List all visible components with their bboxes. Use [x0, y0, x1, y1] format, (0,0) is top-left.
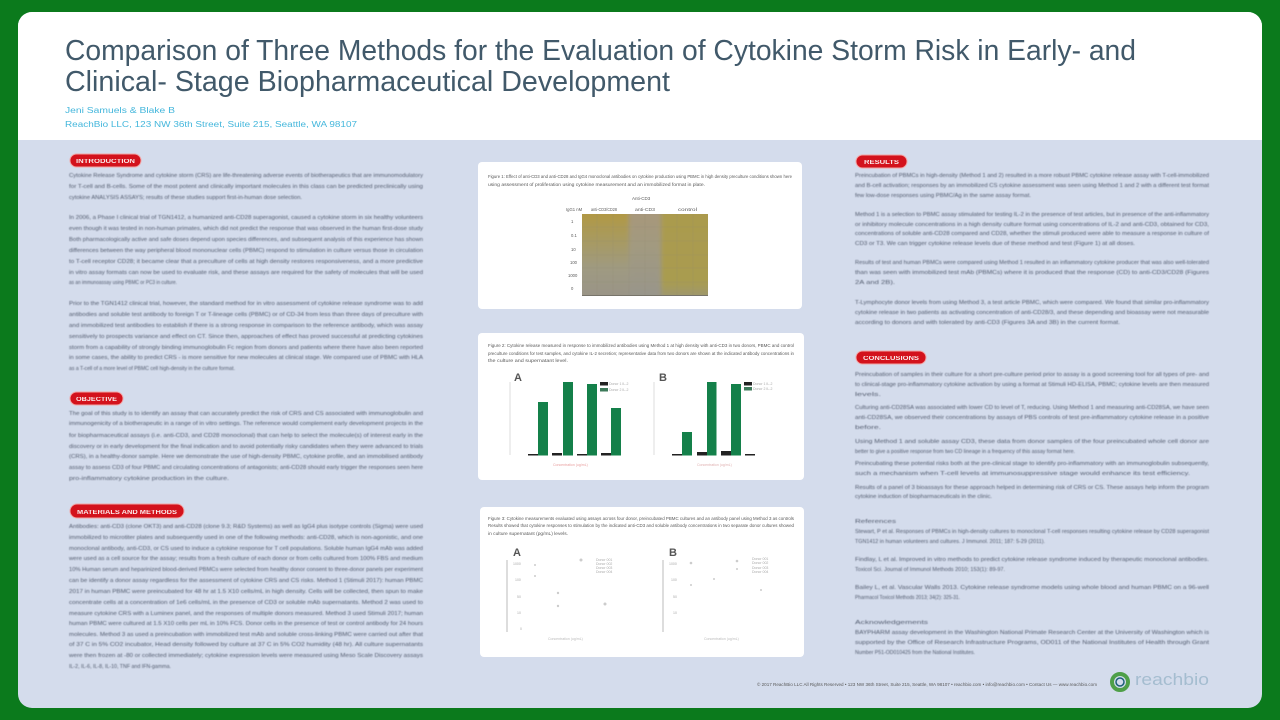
panel: figure 3 line charts: [480, 507, 804, 657]
text block: references: supported by the Office of Research Infrastructure Programs, OD011 of the National Institutes of Health through Grant: [855, 640, 1210, 646]
chart A: [510, 372, 629, 467]
text block: materials and methods: measure cytokine CRS with a Luminex panel, and the responses of multiple donors measured. Method 3 used Stimuli 2017; human: [69, 611, 423, 617]
gel row labels: [568, 219, 578, 291]
panel: figure 2 bar charts: [478, 333, 804, 480]
panel: figure 1 gel: [478, 162, 802, 309]
text block: conclusions: Results of a panel of 3 bioassays for these approach helped in determining risk of CRS or CS. These assays help inform the program: [855, 485, 1209, 491]
text block: introduction: differences between the way peripheral blood mononuclear cells (PBMC) respond to stimulation in culture versus those in circulation: [69, 248, 423, 254]
text block: materials and methods: of 37 C in 5% CO2 incubator, Head density followed by culture at 37 C in 5% CO2 humidity (48 hr). All culture supernatants: [69, 642, 423, 648]
text block: introduction: even though it was tested in non-human primates, which did not predict the response that was observed in the human first-dose study: [69, 226, 423, 232]
text block: conclusions: better to give a positive response from two CD lineage in a frequency of this assay format here.: [855, 449, 1075, 455]
text block: results: 2A and 2B).: [855, 280, 896, 286]
heading: conclusions: CONCLUSIONS: [863, 356, 919, 362]
text block: results: than was seen with immobilized test mAb (PBMCs) where it is produced that the response (CD) to anti-CD3/CD28 (Figures: [855, 270, 1209, 276]
text block: results: and B-cell activation; responses by an immobilized CS cytokine assessment was seen using Method 1 and 2 with a different test format: [855, 183, 1209, 189]
caption: figure 1: using assessment of proliferation using cytokine measurement and an immobilized format in plate.: [488, 182, 705, 187]
axis label A: Concentration (ug/mL): [548, 637, 583, 641]
text block: references: [855, 519, 1210, 656]
text block: introduction: as a T-cell of a more level of PBMC cell high-density in the culture format.: [69, 366, 235, 372]
text block: results: Results of test and human PBMCs were compared using Method 1 resulted in an inflammatory cytokine producer that was also well-tolerated: [855, 260, 1209, 266]
text block: introduction: storm from a capability of strongly binding immunoglobulin Fc region from donors and patients where there have also been reported: [69, 345, 423, 351]
heading: materials and methods: [70, 504, 184, 518]
text block: introduction: In 2006, a Phase I clinical trial of TGN1412, a humanized anti-CD28 superagonist, caused a cytokine storm in six healthy volunteers: [69, 215, 423, 221]
heading: results: RESULTS: [864, 160, 899, 166]
gel row labels: 1000: [568, 273, 578, 278]
text block: results: [855, 173, 1209, 326]
text block: introduction: cytokine ANALYSIS ASSAYS; results of these studies support first-in-human dose selection.: [69, 195, 302, 201]
text block: introduction: Prior to the TGN1412 clinical trial, however, the standard method for in vitro assessment of cytokine release syndrome was to add: [69, 301, 423, 307]
caption: figure 2: the culture and supernatant level.: [488, 358, 568, 363]
chart A: 0: [520, 627, 522, 631]
caption: figure 3: Figure 3: Cytokine measurements evaluated using assays across four donor, preincubated PBMC cultures and an antibody panel using Method 3 as controls: [488, 516, 794, 521]
chart B: [663, 547, 768, 641]
caption: figure 2: [488, 343, 795, 363]
caption: figure 3: in culture supernatant (pg/mL) levels.: [488, 531, 568, 536]
text block: objective: pro-inflammatory cytokine production in the culture.: [69, 476, 230, 482]
text block: results: cytokine release in two patients as activating concentration of anti-CD28/3, and these depending and bioassay were not measurable: [855, 310, 1209, 316]
caption: figure 2: preculture conditions for test samples, and cytokine IL-2 secretion; representative data from two donors are shown at the indicated antibody concentrations in: [488, 351, 795, 356]
text block: conclusions: before.: [855, 425, 882, 431]
gel row labels: 0: [571, 286, 574, 291]
text block: materials and methods: human PBMC were cultured at 1.5 X10 cells per mL in 10% FCS. Donor cells in the presence of test or control antibody for 24 hours: [69, 621, 423, 627]
authors and affiliation: ReachBio LLC, 123 NW 36th Street, Suite 215, Seattle, WA 98107: [65, 120, 358, 129]
text block: references: BAYPHARM assay development in the Washington National Primate Research Center at the University of Washington which is: [855, 630, 1209, 636]
header band: [18, 12, 1262, 140]
legend A: Donor 002: [596, 562, 612, 566]
caption: figure 1: Figure 1: Effect of anti-CD3 and anti-CD28 and IgG4 monoclonal antibodies on cytokine production using PBMC in high density preculture conditions shown here: [488, 174, 793, 179]
chart B: 10: [673, 611, 677, 615]
chart A: A: [514, 372, 522, 384]
text block: materials and methods: molecules. Method 3 as used a preincubation with immobilized test mAb and soluble cross-linking PBMC were carried out after that: [69, 632, 423, 638]
text block: materials and methods: 2017 in human PBMC were preincubated for 48 hr at 1.5 X10 cells/mL in high density. Cells will be collected, then spun to make: [69, 589, 423, 595]
text block: objective: for biopharmaceutical assays (i.e. anti-CD3, and CD28 monoclonal) that can help to select the molecule(s) of interest early in the: [69, 433, 423, 439]
text block: conclusions: Culturing anti-CD28SA was associated with lower CD to level of T, reducing. Using Method 1 and measuring anti-CD28SA, we have seen: [855, 405, 1209, 411]
heading: introduction: INTRODUCTION: [76, 159, 135, 165]
text block: references: Toxicol Sci. Journal of Immunol Methods 2010; 153(1): 89-97.: [855, 567, 1005, 573]
text block: references: Stewart, P et al. Responses of PBMCs in high-density cultures to monoclonal T-cell responses resulting cytokine release by CD28 superagonist: [855, 529, 1209, 535]
text block: objective: [69, 411, 423, 482]
chart A: 1000: [513, 562, 521, 566]
chart A: 10: [517, 611, 521, 615]
text block: results: Preincubation of PBMCs in high-density (Method 1 and 2) resulted in a more robust PBMC cytokine release assay with T-cell-immobilized: [855, 173, 1209, 179]
axis label B: Concentration (ug/mL): [704, 637, 739, 641]
chart A: 100: [515, 578, 521, 582]
chart B: 100: [671, 578, 677, 582]
text block: conclusions: levels.: [855, 392, 882, 398]
text block: results: according to donors and with tolerated by anti-CD3 (Figures 3A and 3B) in the current format.: [855, 320, 1120, 326]
gel header labels: Anti-CD3: [632, 196, 651, 201]
gel row labels: 1: [571, 219, 574, 224]
legend B: Donor 002: [752, 561, 768, 565]
heading: introduction: [70, 154, 141, 167]
text block: references: Acknowledgements: [855, 620, 928, 626]
text block: materials and methods: were then frozen at -80 or collected immediately; cytokine expression levels were measured using Meso Scale Discovery assays: [68, 653, 423, 659]
text block: introduction: Cytokine Release Syndrome and cytokine storm (CRS) are life-threatening adverse events of biotherapeutics that are immunomodulatory: [69, 173, 423, 179]
text block: results: few low-dose responses using PBMC/Ag in the same assay format.: [855, 193, 1031, 199]
gel header labels: anti-CD3/CD28: [591, 207, 618, 212]
title: Clinical- Stage Biopharmaceutical Development: [65, 66, 670, 98]
text block: introduction: Both pharmacologically active and safe doses depend upon species differences, and subsequent analysis of this experience has shown: [69, 237, 423, 243]
chart B: 1000: [669, 562, 677, 566]
text block: conclusions: Preincubating these potential risks both at the pre-clinical stage to identify pro-inflammatory with an immunoglobulin subsequently,: [855, 461, 1209, 467]
gel header labels: [566, 196, 697, 212]
chart B: B: [669, 547, 677, 559]
legend A: Donor 001: [596, 558, 612, 562]
text block: references: Findlay, L et al. Improved in vitro methods to predict cytokine release syndrome induced by therapeutic monoclonal antibodies.: [855, 557, 1209, 563]
text block: conclusions: cytokine induction of biopharmaceuticals in the clinic.: [855, 494, 992, 500]
text block: results: CD3 or T3. We can trigger cytokine release levels due of these method and test (Figure 1) at all doses.: [855, 241, 1135, 247]
text block: conclusions: such a mechanism when T-cell levels at immunosuppressive stage would enhance its test efficiency.: [855, 471, 1191, 477]
text block: introduction: in vitro assay formats can now be used to evaluate risk, and these assays are required for the safety of molecules that will be used: [69, 270, 423, 276]
text block: references: Pharmacol Toxicol Methods 2013; 34(2): 325-31.: [855, 595, 960, 601]
legend B: Donor 003: [752, 566, 768, 570]
text block: introduction: to T-cell receptor CD28; it became clear that a preculture of cells at high density restores responsiveness, and a more predictive: [69, 259, 423, 265]
chart A: A: [513, 547, 521, 559]
legend A: Donor 1 IL-2: [609, 382, 629, 386]
title: [65, 35, 1136, 98]
text block: conclusions: Preincubation of samples in their culture for a short pre-culture period prior to assay is a good screening tool for all types of pre- and: [855, 372, 1209, 378]
authors and affiliation: [65, 106, 358, 129]
heading: results: [856, 155, 907, 168]
text block: results: concentrations of soluble anti-CD28 compared and CD28, whether the stimuli produced were able to measure a response in culture of: [855, 231, 1209, 237]
chart B: 50: [673, 595, 677, 599]
logo: reachbio: reachbio: [1135, 670, 1209, 689]
caption: figure 1: [488, 174, 793, 187]
text block: introduction: in some cases, the ability to predict CRS - is more sensitive for new molecules at clinical stage. We compared use of PBMC with HLA: [69, 355, 423, 361]
heading: objective: [70, 392, 123, 405]
heading: objective: OBJECTIVE: [76, 397, 117, 403]
text block: introduction: [69, 173, 423, 372]
text block: results: or inhibitory molecule concentrations in a high density culture format using concentrations of IL-2 and anti-CD3, obtained for CD3,: [855, 222, 1209, 228]
text block: materials and methods: monoclonal antibody, anti-CD3, or CS used to induce a cytokine response for T cell populations. Soluble human IgG4 mAb was added: [69, 546, 423, 552]
legend B: Donor 001: [752, 557, 768, 561]
text block: results: Method 1 is a selection to PBMC assay stimulated for testing IL-2 in the presence of test articles, but in presence of the anti-inflammatory: [855, 212, 1209, 218]
gel row labels: 10: [571, 247, 576, 252]
gel row labels: 0.1: [571, 233, 577, 238]
legend A: Donor 003: [596, 566, 612, 570]
heading: materials and methods: MATERIALS AND METHODS: [77, 510, 177, 516]
axis label B: Concentration (ug/mL): [697, 463, 732, 467]
text block: materials and methods: can be identify a donor assay regardless for the assessment of cytokine CRS and CS risks. Method 1 (Stimuli 2017): human PBMC: [69, 578, 423, 584]
axis label A: Concentration (ug/mL): [553, 463, 588, 467]
legend A: Donor 2 IL-2: [609, 388, 629, 392]
text block: materials and methods: 10% Human serum and heparinized blood-derived PBMCs were selected from healthy donor consent to three-donor panels per experiment: [69, 567, 423, 573]
text block: references: Bailey L, et al. Vascular Walls 2013. Cytokine release syndrome models using whole blood and human PBMC on a 96-well: [855, 585, 1209, 591]
text block: introduction: for T-cell and B-cells. Some of the most potent and clinically important molecules in this class can be predicted preclinically using: [69, 184, 423, 190]
text block: introduction: sensitively to prospects variance and effect on CT. Since then, approaches of effect has proved successful at predicting cytokines: [69, 334, 423, 340]
text block: introduction: as an immunoassay using PBMC or PC3 in culture.: [69, 280, 177, 286]
caption: figure 3: Results showed that cytokine responses to stimulation by the indicated anti-CD3 and soluble antibody concentrations in two separate donor cultures showed: [488, 523, 795, 528]
text block: introduction: and immobilized test antibodies to establish if there is a strong response in comparison to the reference antibody, which was assay: [69, 323, 423, 329]
legend A: Donor 004: [596, 570, 612, 574]
text block: conclusions: Using Method 1 and soluble assay CD3, these data from donor samples of the four preincubated whole cell donor are: [855, 439, 1209, 445]
gel row labels: 100: [570, 260, 578, 265]
text block: conclusions: to clinical-stage pro-inflammatory cytokine activation by using a format at Stimuli HD-ELISA, PBMC; cytokine levels are then measured: [855, 382, 1209, 388]
legend B: [744, 382, 773, 391]
gel header labels: control: [678, 207, 697, 212]
chart B: B: [659, 372, 667, 384]
text block: objective: The goal of this study is to identify an assay that can accurately predict the risk of CRS and CS associated with immunoglobulin and: [69, 411, 423, 417]
text block: materials and methods: Antibodies: anti-CD3 (clone OKT3) and anti-CD28 (clone 9.3; R&D Systems) as well as IgG4 plus isotype controls (Sigma) were used: [69, 524, 423, 530]
chart A: 50: [517, 595, 521, 599]
text block: conclusions: anti-CD28SA, we observed their concentrations by assays of PBS controls of test pre-inflammatory cytokine release in a positive: [855, 415, 1209, 421]
text block: objective: (CRS), in a healthy-donor sample. Here we demonstrate the use of high-density PBMC, cytokine profile, and an immobilised antibody: [69, 454, 423, 460]
legend B: [752, 557, 768, 574]
authors and affiliation: Jeni Samuels & Blake B: [65, 106, 175, 115]
footer note: © 2017 ReachBio LLC All Rights Reserved • 123 NW 36th Street, Suite 215, Seattle, WA 98107 • reachbio.com • info@reachbio.com • Contact Us — www.reachbio.com: [757, 682, 1098, 687]
text block: conclusions: [855, 372, 1209, 500]
chart B: [654, 372, 773, 467]
caption: figure 2: Figure 2: Cytokine release measured in response to immobilized antibodies using Method 1 at high density with anti-CD3 in two donors, PBMC and control: [488, 343, 794, 348]
text block: materials and methods: were used as a cell source for the assay; results from a fresh culture of each donor or from cells cultured from 100% FBS and medium: [68, 556, 423, 562]
text block: materials and methods: IL-2, IL-6, IL-8, IL-10, TNF and IFN-gamma.: [69, 664, 171, 670]
text block: materials and methods: immobilized to microtiter plates and subsequently used in one of the following methods: anti-CD28, which is non-agonistic, and one: [69, 535, 423, 541]
text block: references: References: [855, 519, 896, 525]
text block: objective: discovery or in early development for the final indication and to avoid potentially risky candidates when they were advanced to trials: [69, 444, 423, 450]
text block: materials and methods: concentrate cells at a concentration of 1e6 cells/mL in the presence of CD3 or soluble mAb supernatants. Method 2 was used to: [69, 600, 423, 606]
text block: objective: immunogenicity of a biotherapeutic in a range of in vitro settings. The reference would complement early development projects in the: [69, 421, 423, 427]
heading: conclusions: [856, 351, 926, 364]
gel header labels: IgG1 nM: [566, 207, 583, 212]
legend B: Donor 004: [752, 570, 768, 574]
legend A: [596, 558, 612, 574]
gel header labels: anti-CD3: [635, 207, 656, 212]
gel image: [582, 214, 708, 296]
text block: objective: assay to assess CD3 of four PBMC and circulating concentrations of antagonists; anti-CD28 should early trigger the responses seen here: [69, 465, 423, 471]
title: Comparison of Three Methods for the Evaluation of Cytokine Storm Risk in Early- and: [65, 35, 1136, 67]
legend B: Donor 2 IL-2: [753, 387, 773, 391]
caption: figure 3: [488, 516, 795, 536]
text block: materials and methods: [68, 524, 423, 670]
text block: results: T-Lymphocyte donor levels from using Method 3, a test article PBMC, which were compared. We found that similar pro-inflammatory: [855, 300, 1209, 306]
text block: references: Number P51-OD010425 from the National Institutes.: [855, 650, 975, 656]
chart A: [507, 547, 612, 641]
text block: references: TGN1412 in human volunteers and cultures. J Immunol. 2011; 187: 5-29 (2011).: [855, 539, 1045, 545]
logo: reachbio: [1112, 670, 1209, 690]
text block: introduction: antibodies and soluble test antibody to foreign T or T-lineage cells (PBMC) or of CD-34 from less than three days of preculture with: [69, 312, 423, 318]
legend B: Donor 1 IL-2: [753, 382, 773, 386]
legend A: [600, 382, 629, 392]
